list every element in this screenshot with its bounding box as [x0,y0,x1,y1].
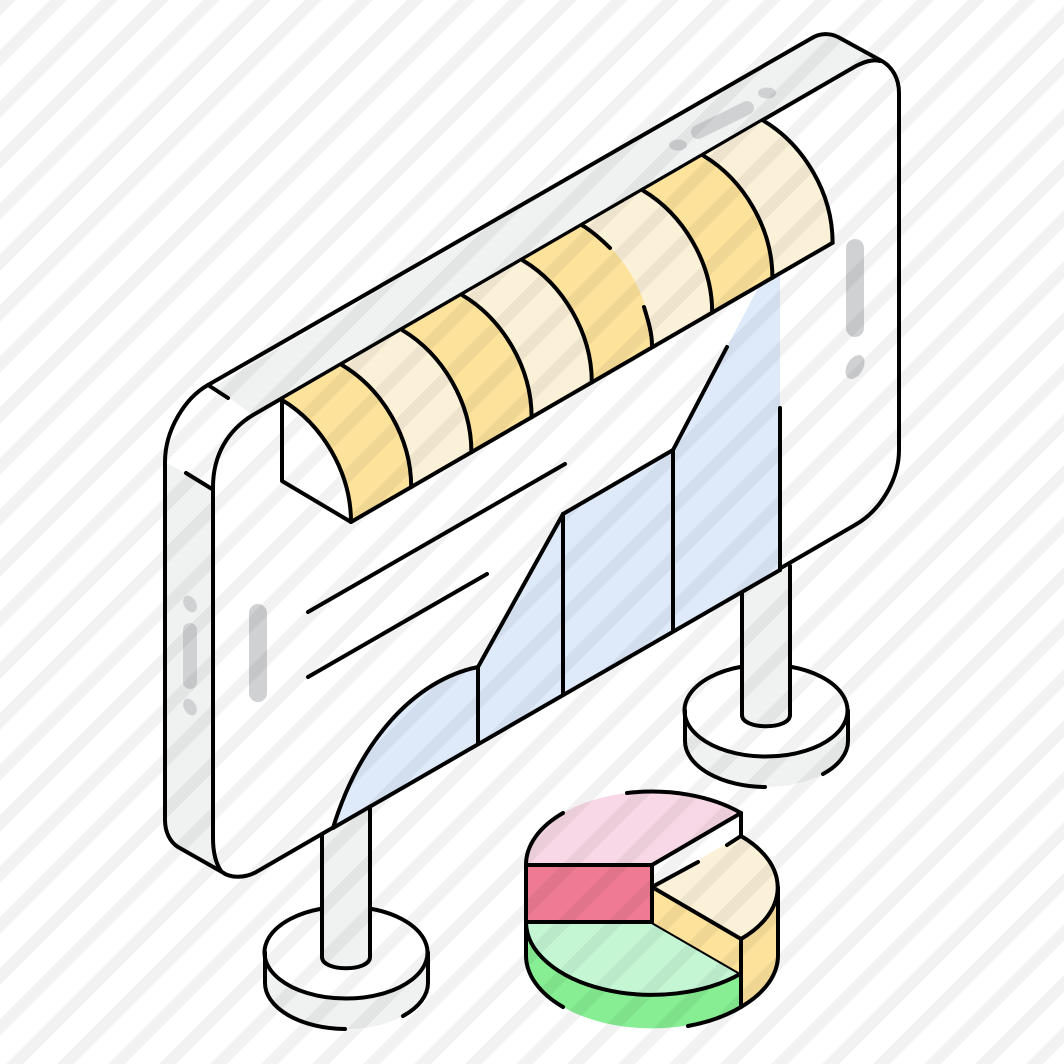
right post with round base [684,566,848,787]
area chart [333,246,780,828]
text placeholder lines [308,464,565,677]
pie slice: green [526,922,741,1028]
grey highlight marks on frame [180,88,868,718]
segmented awning banner [282,121,833,522]
billboard frame [165,34,899,877]
pie chart [526,792,779,1028]
pie slice: pink [526,792,741,922]
left post with round base [265,808,428,1029]
pie slice: yellow [652,835,779,1007]
